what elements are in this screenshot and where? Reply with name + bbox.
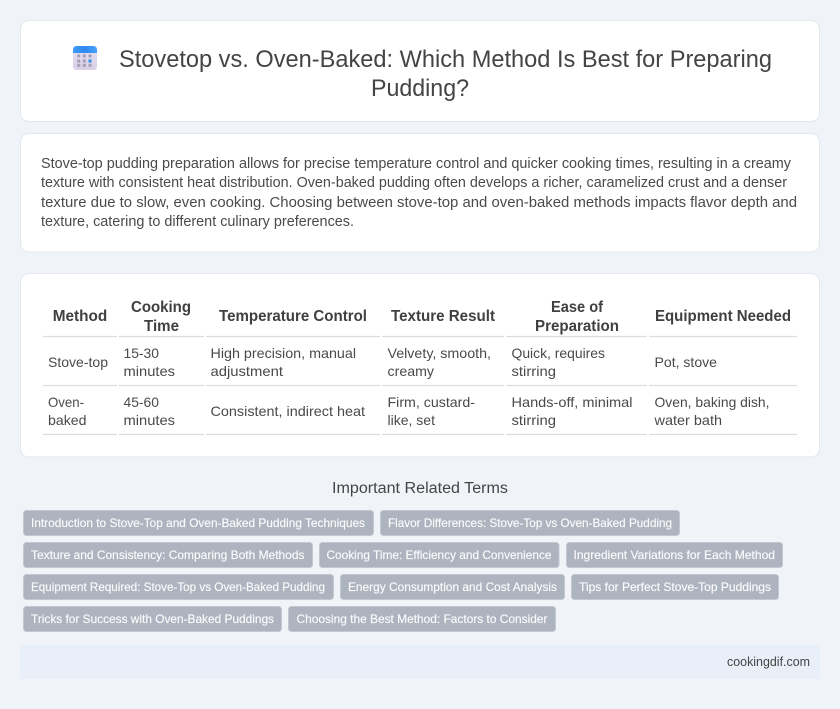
- related term tags: Ingredient Variations for Each Method: [574, 548, 775, 562]
- title: [119, 46, 772, 102]
- table row: stove-top: Quick, requires: [512, 345, 605, 361]
- table row: stove-top: minutes: [124, 363, 175, 379]
- related term tags: Tips for Perfect Stove-Top Puddings: [579, 580, 771, 594]
- table header: Method: [53, 308, 107, 325]
- related term tags: Energy Consumption and Cost Analysis: [348, 580, 557, 594]
- table header: Preparation: [535, 318, 619, 335]
- table row: oven-baked: Oven-: [48, 394, 84, 410]
- related term tags: [24, 510, 782, 632]
- icon: calendar: [73, 46, 97, 70]
- title: Pudding?: [371, 75, 469, 102]
- table header: [53, 299, 791, 335]
- text block: introduction: [41, 156, 797, 230]
- table row: stove-top: creamy: [388, 363, 434, 379]
- table header: Temperature Control: [219, 308, 367, 325]
- panel: introduction text: [20, 134, 820, 252]
- panel: header: [20, 20, 820, 122]
- related term tags: Texture and Consistency: Comparing Both Methods: [31, 548, 305, 562]
- table row: stove-top: Pot, stove: [654, 354, 717, 370]
- table row: oven-baked: Firm, custard-: [388, 394, 475, 410]
- table row: oven-baked: baked: [48, 412, 86, 428]
- table row: stove-top: stirring: [512, 363, 556, 379]
- related term tags: Equipment Required: Stove-Top vs Oven-Baked Pudding: [31, 580, 325, 594]
- table row: stove-top: adjustment: [210, 363, 283, 379]
- table row: oven-baked: water bath: [653, 412, 722, 428]
- table row: stove-top: [48, 345, 717, 379]
- text block: introduction: texture, catering to different culinary preferences.: [41, 214, 354, 230]
- table row: oven-baked: Consistent, indirect heat: [210, 403, 365, 419]
- table row: oven-baked: [48, 394, 770, 428]
- related term tags: Introduction to Stove-Top and Oven-Baked Pudding Techniques: [31, 516, 365, 530]
- table row: oven-baked: like, set: [388, 412, 435, 428]
- table row: oven-baked: stirring: [512, 412, 556, 428]
- table header: Ease of: [551, 299, 604, 316]
- related term tags: Flavor Differences: Stove-Top vs Oven-Baked Pudding: [388, 516, 672, 530]
- title: Stovetop vs. Oven-Baked: Which Method Is Best for Preparing: [119, 46, 772, 73]
- table row: oven-baked: Hands-off, minimal: [512, 394, 632, 410]
- table row: oven-baked: 45-60: [124, 394, 159, 410]
- table header: Equipment Needed: [655, 308, 791, 325]
- text block: introduction: Stove-top pudding preparation allows for precise temperature control and quicker cooking times, resulting in a creamy: [41, 156, 792, 172]
- related term tags: Choosing the Best Method: Factors to Consider: [296, 612, 548, 626]
- table row: stove-top: Velvety, smooth,: [388, 345, 491, 361]
- table row: oven-baked: Oven, baking dish,: [654, 394, 770, 410]
- table header: Time: [144, 318, 179, 335]
- table row: stove-top: 15-30: [124, 345, 159, 361]
- related term tags: Tricks for Success with Oven-Baked Puddings: [31, 612, 274, 626]
- footer: [20, 645, 820, 679]
- table row: oven-baked: minutes: [124, 412, 175, 428]
- footer: cookingdif.com: [727, 655, 810, 669]
- related term tags: Cooking Time: Efficiency and Convenience: [326, 548, 552, 562]
- panel: comparison table: [20, 274, 820, 457]
- text block: introduction: texture due to slow, even cooking. Choosing between stove-top and oven-baked methods impacts flavor depth and: [41, 195, 797, 211]
- heading: important related terms: Important Related Terms: [332, 480, 508, 497]
- text block: introduction: texture with consistent heat distribution. Oven-baked pudding often develops a richer, caramelized crust and a denser: [41, 175, 787, 191]
- table row: stove-top: Stove-top: [48, 354, 108, 370]
- table header: Texture Result: [391, 308, 495, 325]
- table header: Cooking: [131, 299, 191, 316]
- table row: stove-top: High precision, manual: [210, 345, 356, 361]
